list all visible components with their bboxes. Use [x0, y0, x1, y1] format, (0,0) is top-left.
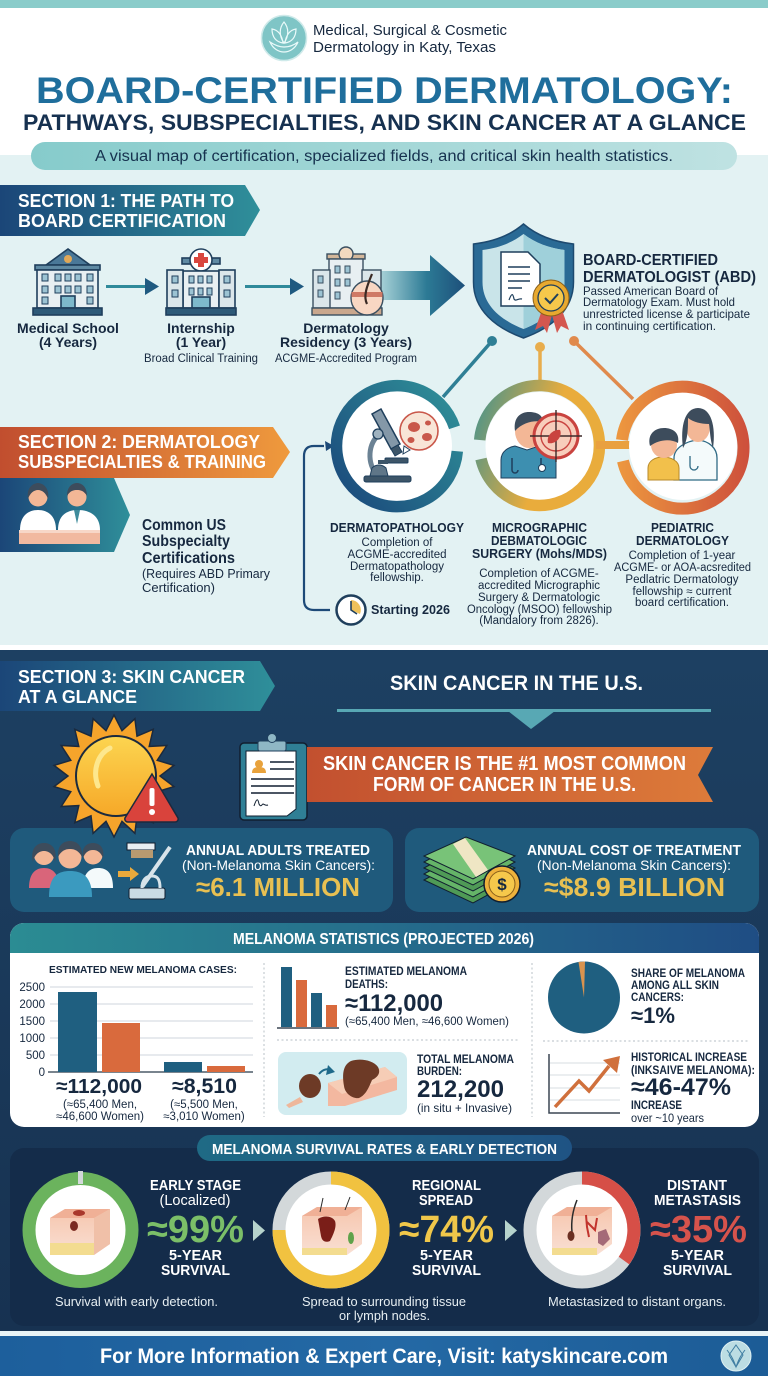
stat: historical increase: ≈46-47% — [631, 1074, 731, 1101]
section 1 banner: BOARD CERTIFICATION — [18, 211, 226, 231]
panel: micrographic surgery — [467, 385, 632, 627]
description — [467, 568, 612, 627]
survival heading pill: MELANOMA SURVIVAL RATES & EARLY DETECTION — [212, 1142, 557, 1158]
stat: in situ cases: ≈8,510 — [172, 1075, 237, 1098]
icon: doctor and child — [648, 408, 717, 480]
stat: distant metastasis — [650, 1177, 747, 1279]
skin cancer heading: SKIN CANCER IN THE U.S. — [390, 672, 643, 695]
tagline: Medical, Surgical & Cosmetic — [313, 22, 507, 39]
description — [347, 537, 447, 584]
stat: total burden: TOTAL MELANOMA — [417, 1054, 514, 1066]
top stripe — [0, 0, 768, 8]
name: MICROGRAPHIC — [492, 520, 588, 535]
arrow: stage two to three — [505, 1220, 517, 1241]
footer: For More Information & Expert Care, Visit: katyskincare.com — [100, 1345, 668, 1368]
illustration: skin block with spread — [302, 1197, 362, 1255]
footer — [0, 1331, 768, 1376]
stat: distant metastasis: 5-YEAR — [671, 1247, 724, 1264]
stat: total burden: 212,200 — [417, 1076, 504, 1103]
certification text: in continuing certification. — [583, 319, 716, 333]
section 1 banner: SECTION 1: THE PATH TO — [18, 191, 234, 211]
stat: regional spread: SURVIVAL — [412, 1262, 481, 1279]
survival heading pill — [197, 1135, 572, 1161]
ring: distant metastasis 35 percent — [530, 1178, 634, 1282]
title: PATHWAYS, SUBSPECIALTIES, AND SKIN CANCER AT A GLANCE — [23, 110, 746, 135]
icon: microscope — [364, 409, 438, 482]
stat: deaths: (≈65,400 Men, ≈46,600 Women) — [345, 1014, 509, 1028]
icon: dermatology residency building with skin follicle — [312, 247, 383, 315]
description: Surgery & Dermatologic — [478, 592, 600, 604]
page background: header — [0, 0, 768, 155]
tagline — [313, 22, 507, 56]
panel: pediatric dermatology — [614, 387, 751, 609]
stat: in situ cases: (≈5,500 Men, — [170, 1099, 238, 1111]
title: BOARD-CERTIFIED DERMATOLOGY: — [36, 70, 733, 111]
description: Pedlatric Dermatology — [625, 574, 739, 586]
ring — [622, 387, 744, 509]
stat: distant metastasis: DISTANT — [667, 1177, 727, 1194]
bar chart: new melanoma cases: 1500 — [19, 1016, 45, 1028]
stat text — [182, 842, 375, 902]
captions — [55, 1294, 726, 1323]
stat: in situ cases: ≈3,010 Women) — [163, 1111, 245, 1123]
description: Oncology (MSOO) fellowship — [467, 604, 612, 616]
section 3 banner: AT A GLANCE — [18, 687, 137, 707]
stat: regional spread — [399, 1177, 494, 1279]
captions: or lymph nodes. — [339, 1308, 430, 1323]
name — [636, 520, 729, 548]
icon: money and coin — [424, 837, 520, 903]
icon: clock — [336, 596, 366, 624]
arrow: stage one to two — [253, 1220, 265, 1241]
captions: Metastasized to distant organs. — [548, 1294, 726, 1309]
stat: total burden: (in situ + Invasive) — [417, 1101, 512, 1115]
illustration: skin block with metastasis — [552, 1200, 612, 1255]
certification text: unrestricted license & participate — [583, 307, 750, 321]
stat: distant metastasis: SURVIVAL — [663, 1262, 732, 1279]
stat: share: CANCERS: — [631, 992, 684, 1004]
subspecialty intro text: (Requires ABD Primary — [142, 567, 271, 581]
logo emblem — [262, 16, 306, 60]
pathway labels: Medical School — [17, 320, 119, 336]
stat: early stage: EARLY STAGE — [150, 1177, 241, 1194]
stat: distant metastasis: ≈35% — [650, 1209, 747, 1251]
panel header: MELANOMA STATISTICS (PROJECTED 2026) — [233, 931, 534, 948]
title — [23, 70, 746, 135]
icon: two doctors — [19, 483, 100, 544]
stat: early stage: ≈99% — [147, 1209, 244, 1251]
name: DEBMATOLOGIC — [491, 533, 588, 548]
certification text — [583, 252, 756, 333]
description: Completion of 1-year — [629, 550, 736, 562]
description: accredited Micrographic — [478, 580, 600, 592]
heading divider with pointer — [337, 709, 711, 729]
stat: distant metastasis: METASTASIS — [654, 1192, 741, 1209]
mini bar chart: deaths — [277, 967, 339, 1028]
stat: regional spread: REGIONAL — [412, 1177, 481, 1194]
name: SURGERY (Mohs/MDS) — [472, 546, 607, 561]
bar chart: new melanoma cases: 2000 — [19, 999, 45, 1011]
stat: early stage: (Localized) — [160, 1193, 230, 1209]
pathway labels: Internship — [167, 320, 235, 336]
arrow: starting 2026 to dermatopathology — [304, 441, 334, 610]
ring — [337, 386, 485, 507]
name — [472, 520, 607, 561]
panel header — [10, 923, 759, 953]
callout ribbon: SKIN CANCER IS THE #1 MOST COMMON — [323, 753, 686, 775]
description: Completion of ACGME- — [479, 568, 599, 580]
description: Completion of — [362, 537, 433, 549]
connectors from shield to subspecialties — [443, 336, 633, 399]
callout ribbon — [307, 747, 713, 802]
stat: in situ cases — [163, 1075, 245, 1123]
illustration: skin block localized — [50, 1209, 110, 1255]
certification text: Dermatology Exam. Must hold — [583, 295, 735, 309]
description — [614, 550, 751, 609]
illustration: melanoma burden — [278, 1052, 407, 1115]
name: PEDIATRIC — [651, 520, 715, 535]
pathway labels: Residency (3 Years) — [280, 334, 412, 350]
bar chart: new melanoma cases: 0 — [39, 1067, 45, 1079]
stat text: (Non-Melanoma Skin Cancers): — [537, 857, 731, 873]
subspecialty intro text — [142, 517, 271, 595]
name: DERMATOPATHOLOGY — [330, 520, 464, 535]
bar chart: new melanoma cases: 1000 — [19, 1033, 45, 1045]
stat: regional spread: ≈74% — [399, 1209, 494, 1251]
description: ACGME- or AOA-acsredited — [614, 562, 751, 574]
ring — [480, 385, 632, 505]
footer logo — [721, 1341, 751, 1371]
subspecialty intro text: Subspecialty — [142, 533, 230, 550]
stat text: (Non-Melanoma Skin Cancers): — [182, 857, 375, 873]
section 1 banner — [0, 185, 260, 236]
subspecialty intro text: Certification) — [142, 581, 215, 595]
name: DERMATOLOGY — [636, 533, 729, 548]
stat text: ANNUAL ADULTS TREATED — [186, 842, 370, 859]
section 3 banner: SECTION 3: SKIN CANCER — [18, 667, 245, 687]
dark section background — [0, 650, 768, 1332]
stat: historical increase: over ~10 years — [631, 1111, 704, 1125]
stat: historical increase: (INKSAIVE MELANOMA): — [631, 1065, 755, 1077]
stat: total burden: BURDEN: — [417, 1066, 462, 1078]
stat: historical increase — [631, 1052, 755, 1125]
icon: medical school building — [33, 249, 102, 315]
stat text: ≈$8.9 BILLION — [544, 872, 725, 902]
stat: share: SHARE OF MELANOMA — [631, 968, 745, 980]
pathway labels — [17, 320, 417, 365]
icon: internship hospital — [166, 249, 236, 315]
light section background — [0, 155, 768, 645]
subtitle pill: A visual map of certification, specialized fields, and critical skin health statistics. — [95, 148, 673, 165]
captions: Spread to surrounding tissue — [302, 1294, 466, 1309]
section 2 banner: SECTION 2: DERMATOLOGY — [18, 431, 261, 452]
certification text: DERMATOLOGIST (ABD) — [583, 269, 756, 286]
icon: surgeon with target — [501, 410, 582, 478]
certification text: Passed American Board of — [583, 284, 719, 298]
pathway labels: ACGME-Accredited Program — [275, 353, 417, 365]
pathway labels: (4 Years) — [39, 334, 97, 350]
subspecialty intro text: Common US — [142, 517, 226, 534]
stat: invasive cases: ≈112,000 — [56, 1075, 142, 1098]
stat: deaths: ESTIMATED MELANOMA — [345, 966, 467, 978]
icon: sun with warning — [54, 715, 178, 837]
stat: early stage — [147, 1177, 244, 1279]
stat: early stage: 5-YEAR — [169, 1247, 222, 1264]
stat: share: AMONG ALL SKIN — [631, 980, 719, 992]
stat: deaths: ≈112,000 — [345, 990, 443, 1017]
subtitle pill — [31, 142, 737, 170]
stat: invasive cases: (≈65,400 Men, — [63, 1099, 137, 1111]
bar chart: new melanoma cases — [19, 964, 253, 1079]
stat: share: ≈1% — [631, 1003, 675, 1028]
certification text: BOARD-CERTIFIED — [583, 252, 718, 269]
stat: regional spread: 5-YEAR — [420, 1247, 473, 1264]
panel: annual adults treated — [10, 828, 393, 912]
bar chart: new melanoma cases: 500 — [26, 1050, 45, 1062]
section 2 banner — [0, 427, 290, 478]
stat: invasive cases — [56, 1075, 144, 1123]
arrow: internship to residency — [245, 278, 304, 295]
description: fellowship ≈ current — [632, 586, 732, 598]
description: ACGME-accredited — [347, 549, 447, 561]
logo and practice tagline — [262, 16, 507, 60]
section 2 banner: SUBSPECIALTIES & TRAINING — [18, 451, 266, 472]
stat: total burden — [417, 1054, 514, 1115]
stat: deaths — [345, 966, 509, 1028]
stat text: ≈6.1 MILLION — [196, 872, 360, 902]
captions: Survival with early detection. — [55, 1294, 218, 1309]
stat: deaths: DEATHS: — [345, 979, 388, 991]
description: Dermatopathology — [350, 561, 444, 573]
stat: historical increase: INCREASE — [631, 1100, 682, 1112]
icon: money and coin: $ — [497, 875, 507, 894]
section 3 banner — [0, 661, 275, 711]
line chart: historical increase — [549, 1054, 620, 1113]
bar chart: new melanoma cases: ESTIMATED NEW MELANOMA CASES: — [49, 964, 237, 976]
icon: patients — [29, 841, 113, 897]
subspecialty intro text: Certifications — [142, 550, 235, 567]
big arrow to certification — [380, 255, 465, 316]
stat: share — [631, 968, 745, 1028]
description: board certification. — [635, 597, 729, 609]
pie chart: share of melanoma — [548, 962, 620, 1034]
tagline: Dermatology in Katy, Texas — [313, 39, 496, 56]
panel: doctors pentagon — [0, 478, 130, 552]
stat: early stage: SURVIVAL — [161, 1262, 230, 1279]
panel: annual cost — [405, 828, 759, 912]
bar chart: new melanoma cases: 2500 — [19, 982, 45, 994]
pathway labels: (1 Year) — [176, 334, 226, 350]
description: fellowship. — [370, 572, 424, 584]
panel: melanoma statistics — [10, 923, 759, 1127]
stat text — [527, 842, 741, 902]
panel: survival rates — [10, 1135, 759, 1326]
icon: clipboard — [240, 734, 307, 820]
icon: certification shield — [474, 224, 574, 338]
ring: regional spread 74 percent — [279, 1178, 383, 1282]
stat: invasive cases: ≈46,600 Women) — [56, 1111, 144, 1123]
icon: treatment device — [118, 843, 170, 899]
stat text: ANNUAL COST OF TREATMENT — [527, 842, 741, 859]
stat: historical increase: HISTORICAL INCREASE — [631, 1052, 747, 1064]
ring: early stage 99 percent — [29, 1171, 132, 1282]
description: (Mandalory from 2826). — [479, 615, 599, 627]
stat: regional spread: SPREAD — [419, 1192, 473, 1209]
pathway labels: Dermatology — [303, 320, 389, 336]
starting 2026 label: Starting 2026 — [371, 602, 450, 617]
callout ribbon: FORM OF CANCER IN THE U.S. — [373, 774, 636, 796]
pathway labels: Broad Clinical Training — [144, 353, 258, 365]
panel: dermatopathology — [330, 386, 485, 584]
arrow: school to internship — [106, 278, 159, 295]
